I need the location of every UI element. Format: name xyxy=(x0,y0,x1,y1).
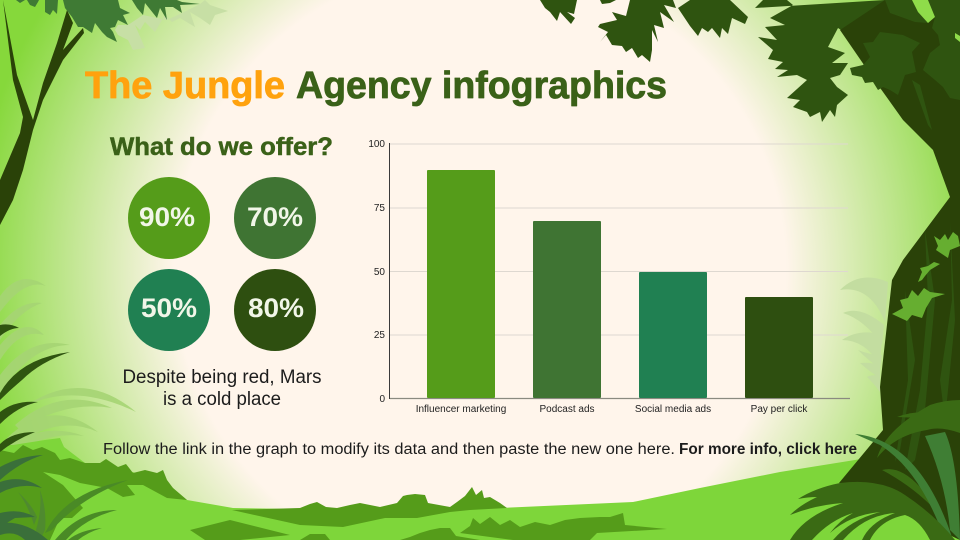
left grass mound xyxy=(0,445,187,540)
canopy on trunk xyxy=(850,0,960,100)
y axis labels: 100 xyxy=(368,139,385,150)
canopy clusters top right xyxy=(540,0,915,122)
category labels: Pay per click xyxy=(751,404,808,415)
y axis xyxy=(388,143,390,399)
moss leaves on trunk xyxy=(892,232,960,321)
footer text: For more info, click here xyxy=(679,441,857,458)
circle 70% xyxy=(234,177,316,259)
footer text: Follow the link in the graph to modify its data and then paste the new one here. xyxy=(103,441,675,458)
left tree trunk xyxy=(0,0,84,225)
faded ferns right xyxy=(840,278,888,392)
bar chart xyxy=(368,139,850,415)
circle 80%: 80% xyxy=(248,293,304,323)
green leaves top left xyxy=(16,0,200,42)
circle 50%: 50% xyxy=(141,293,197,323)
fern bottom right xyxy=(790,400,960,540)
category labels xyxy=(416,404,808,415)
title: Agency infographics xyxy=(296,65,667,107)
ground xyxy=(0,438,960,540)
right tree trunk xyxy=(839,0,960,540)
circle 90% xyxy=(128,177,210,259)
y axis labels: 50 xyxy=(374,267,385,278)
circle 80% xyxy=(234,269,316,351)
title: The Jungle xyxy=(85,65,285,107)
bar: podcast ads xyxy=(533,221,601,398)
centre grass clumps xyxy=(190,487,667,540)
caption: is a cold place xyxy=(163,389,281,410)
bar: influencer marketing xyxy=(427,170,495,398)
circle 50% xyxy=(128,269,210,351)
sky gap in canopy xyxy=(912,0,960,42)
faded ferns left xyxy=(0,279,136,465)
caption xyxy=(122,367,322,410)
y axis labels: 0 xyxy=(379,394,385,405)
caption: Despite being red, Mars xyxy=(122,367,322,388)
heading: what do we offer: What do we offer? xyxy=(110,133,333,161)
ferns left xyxy=(0,324,128,540)
category labels: Influencer marketing xyxy=(416,404,506,415)
y axis labels: 75 xyxy=(374,203,385,214)
y axis labels xyxy=(368,139,385,405)
circle 70%: 70% xyxy=(247,202,303,232)
faded leaves top left xyxy=(115,0,228,50)
bar: social media ads xyxy=(639,272,707,398)
stat circles xyxy=(128,177,316,351)
y axis labels: 25 xyxy=(374,330,385,341)
trunk bark stripes xyxy=(895,80,955,470)
gridlines xyxy=(390,144,848,335)
bar: pay per click xyxy=(745,297,813,398)
x axis xyxy=(390,398,850,400)
category labels: Social media ads xyxy=(635,404,711,415)
circle 90%: 90% xyxy=(139,202,195,232)
title xyxy=(85,65,667,107)
category labels: Podcast ads xyxy=(539,404,595,415)
